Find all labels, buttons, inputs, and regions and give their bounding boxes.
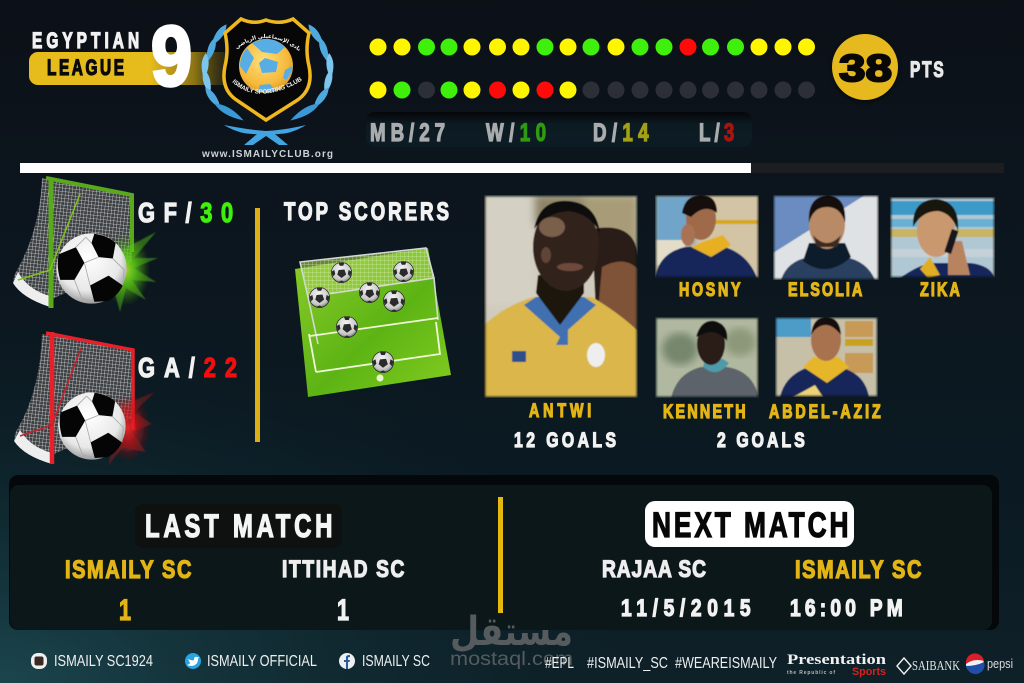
- social footer: ISMAILY SC: [362, 653, 430, 670]
- player names and goal counts: ELSOLIA: [788, 279, 862, 301]
- watermark: mostaql.com: [450, 649, 573, 670]
- match results dots, row 2: [370, 82, 815, 98]
- last match: 1: [119, 592, 131, 627]
- icon: twitter: [185, 653, 201, 669]
- watermark: [450, 609, 573, 670]
- photo: Antwi: [484, 195, 638, 398]
- goals: 12: 12 GOALS: [514, 428, 616, 452]
- divider: [255, 208, 260, 442]
- player names and goal counts: [529, 279, 960, 423]
- sponsor: Saibank: [897, 658, 960, 674]
- social footer: #ISMAILY_SC: [587, 655, 668, 672]
- match results dots, row 1: [370, 38, 815, 56]
- sponsor: Presentation Sports: Sports: [852, 666, 886, 678]
- season stats strip: W/10: [486, 118, 546, 147]
- photo: Kenneth: [655, 317, 759, 398]
- website: www.ISMAILYCLUB.org: [201, 149, 333, 160]
- last match: ISMAILY SC: [65, 556, 191, 584]
- last match: 1: [337, 592, 349, 627]
- goal icon: goals against: [14, 332, 155, 466]
- hashtags: #EPL: [545, 655, 574, 672]
- season stats strip: MB/27: [370, 118, 445, 147]
- icon: facebook: [339, 653, 355, 669]
- laurel wreath: [200, 22, 335, 145]
- shield ball: [239, 39, 293, 93]
- GA label: GA/ 22: [138, 352, 237, 384]
- points badge: [832, 34, 944, 102]
- season stats strip: L/3: [699, 118, 734, 147]
- icon: instagram: [31, 653, 47, 669]
- burst: [102, 232, 158, 312]
- last match: [65, 504, 405, 627]
- next match: 16:00 PM: [790, 594, 903, 622]
- social footer: [31, 653, 777, 672]
- panel: matches: [9, 475, 999, 630]
- photo: Hosny: [655, 195, 759, 278]
- photo: Zika: [890, 197, 995, 278]
- top scorers pitch: [295, 248, 451, 397]
- title: Egyptian League 9: [29, 9, 231, 103]
- player names and goal counts: ZIKA: [920, 279, 960, 301]
- goal icon: goals for: [13, 178, 158, 312]
- photo: Abdel-Aziz: [775, 317, 878, 397]
- GF label: GF/ 30: [138, 197, 233, 229]
- sponsor: Presentation Sports: [787, 652, 887, 678]
- season stats strip: D/14: [593, 118, 649, 147]
- club logo: ISMAILY SPORTING CLUB: [232, 77, 302, 94]
- sponsor: Presentation Sports: Presentation: [787, 652, 887, 668]
- sponsor: Presentation Sports: the Republic of: [787, 670, 835, 676]
- player names and goal counts: ANTWI: [529, 400, 591, 422]
- sponsor: Pepsi: pepsi: [987, 656, 1013, 671]
- next match: 11/5/2015: [621, 594, 751, 622]
- next match: ISMAILY SC: [795, 556, 921, 584]
- player names and goal counts: HOSNY: [679, 279, 741, 301]
- next match: [602, 501, 921, 622]
- goals: 2: 2 GOALS: [717, 428, 805, 452]
- last match: LAST MATCH: [145, 508, 333, 544]
- social footer: ISMAILY SC1924: [54, 653, 153, 670]
- photo: Elsolia: [773, 195, 879, 280]
- watermark: مستقل: [450, 609, 573, 655]
- sponsor: Pepsi: [966, 653, 1013, 674]
- club logo: [202, 16, 334, 145]
- shield: [224, 19, 310, 120]
- sponsor: Saibank: SAIBANK: [912, 659, 960, 674]
- progress bar: [20, 163, 1004, 173]
- next match: RAJAA SC: [602, 555, 706, 583]
- player names and goal counts: ABDEL-AZIZ: [769, 401, 881, 423]
- social footer: ISMAILY OFFICIAL: [207, 653, 317, 670]
- club logo: نادي الإسماعيلي الرياضي: [236, 34, 300, 51]
- last match: ITTIHAD SC: [282, 555, 405, 583]
- top scorers heading: TOP SCORERS: [284, 197, 449, 226]
- social footer: #WEAREISMAILY: [675, 655, 777, 672]
- title: Egyptian League 9: LEAGUE: [47, 56, 124, 81]
- player names and goal counts: KENNETH: [663, 401, 746, 423]
- points badge: PTS: [910, 58, 944, 83]
- title: Egyptian League 9: 9: [151, 9, 192, 103]
- title: Egyptian League 9: EGYPTIAN: [32, 29, 139, 54]
- burst: [106, 392, 155, 466]
- season stats strip: [366, 112, 752, 147]
- next match: NEXT MATCH: [652, 505, 848, 545]
- points badge: 38: [839, 48, 892, 90]
